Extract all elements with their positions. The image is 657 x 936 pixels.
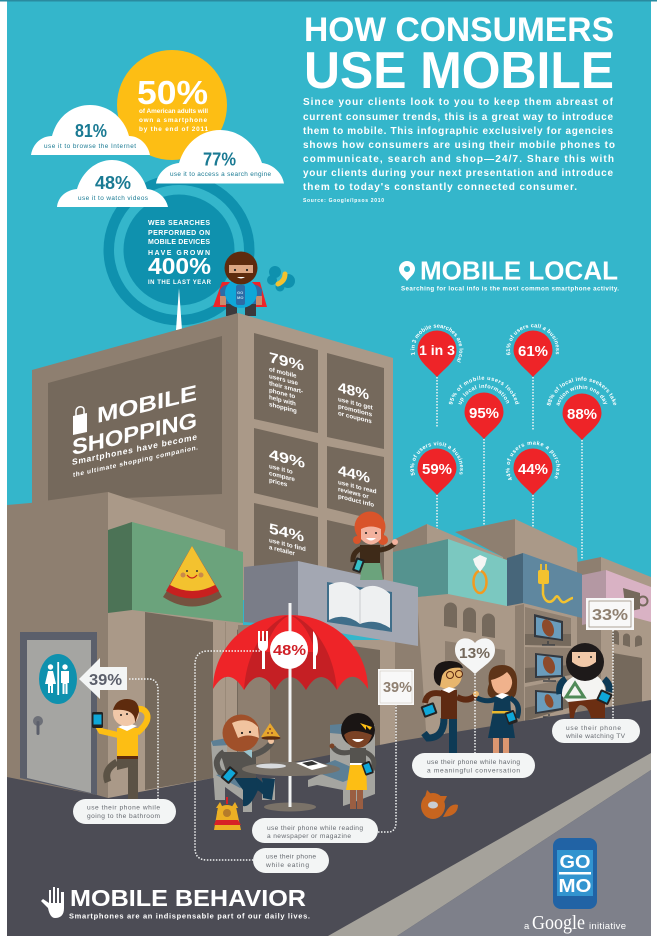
label: bathroom bbox=[73, 799, 176, 824]
cloud: 81%: 81% bbox=[75, 121, 107, 141]
road shoulder bbox=[397, 770, 651, 936]
billboard: pizza bbox=[108, 522, 243, 623]
logo: GO MO bbox=[553, 838, 597, 909]
window stat: 44%: product info bbox=[338, 493, 374, 509]
window stat: 79%: phone to bbox=[269, 387, 295, 401]
label: tv: use their phone bbox=[566, 725, 621, 732]
heading: mobile shopping: SHOPPING bbox=[72, 408, 197, 460]
label: eating bbox=[253, 848, 329, 873]
cloud: 48%: 48% bbox=[95, 173, 131, 193]
character: man scratching head bbox=[92, 699, 148, 799]
pin: 88%: 88% bbox=[567, 406, 597, 423]
yellow circle stat bbox=[117, 50, 227, 160]
callout heart: 13% bbox=[455, 638, 495, 674]
heading: mobile shopping: Smartphones have become bbox=[72, 432, 197, 467]
target circle stat: HAVE GROWN bbox=[148, 250, 210, 257]
window stat: 54%: 54% bbox=[269, 521, 304, 546]
heading: mobile shopping: the ultimate shopping companion. bbox=[73, 444, 198, 479]
pin: 59%: 59% of users visit a business bbox=[410, 441, 463, 476]
callout arrow: 39% bathroom bbox=[79, 658, 127, 699]
tagline: a Google initiative: a bbox=[524, 921, 530, 932]
character: man with glasses bbox=[420, 661, 479, 753]
window stat: 54%: a retailer bbox=[269, 544, 295, 558]
window stat: 48%: 48% bbox=[338, 380, 369, 404]
label: conversation: a meaningful conversation bbox=[427, 768, 520, 774]
right bench bbox=[308, 723, 375, 806]
window stat: 49% bbox=[269, 447, 305, 493]
heading: mobile behavior bbox=[41, 885, 310, 920]
window stat: 49%: compare bbox=[269, 470, 295, 484]
label: conversation bbox=[412, 753, 535, 778]
intro text: shows how consumers are using their mobile phones to bbox=[303, 140, 615, 151]
cloud: 81% bbox=[31, 105, 150, 155]
window stat: 49%: 49% bbox=[269, 447, 305, 472]
billboard: ring bbox=[393, 539, 507, 606]
sidewalk bbox=[328, 753, 651, 936]
window stat: 48%: or coupons bbox=[338, 410, 372, 425]
yellow circle stat: by the end of 2011 bbox=[139, 126, 208, 133]
target circle stat: MOBILE DEVICES bbox=[148, 239, 210, 246]
icon: mug bbox=[623, 588, 648, 612]
icon: fork bbox=[258, 631, 268, 669]
pin: 95%: 95% bbox=[469, 405, 499, 422]
target circle stat: WEB SEARCHES bbox=[148, 220, 210, 227]
icon: plug and cord bbox=[538, 564, 573, 602]
left bench bbox=[211, 738, 275, 812]
cloud: 77% bbox=[156, 130, 284, 184]
tagline: a Google initiative: Google bbox=[532, 912, 585, 934]
window stat: 79%: users use bbox=[269, 373, 298, 387]
icon: hand bbox=[41, 887, 64, 918]
pin: 44%: 44% bbox=[518, 461, 548, 478]
icon: diamond ring bbox=[473, 555, 487, 593]
intro text bbox=[303, 97, 615, 204]
label: conversation: use their phone while having bbox=[427, 759, 520, 766]
callout arrow: 39% bathroom: 39% bbox=[89, 672, 122, 689]
cloud: 48%: use it to watch videos bbox=[78, 195, 148, 202]
window stat: 44%: use it to read bbox=[338, 479, 377, 496]
dotted pin stems bbox=[437, 377, 582, 560]
icon: superhero with phone: MO bbox=[237, 295, 243, 300]
pin: 88%: action within one day bbox=[556, 384, 608, 406]
cafe table base bbox=[264, 603, 316, 812]
intro text: current consumer trends, this is a great way to introduce bbox=[303, 112, 613, 123]
window stat: 79% bbox=[269, 350, 304, 417]
title: HOW CONSUMERS bbox=[304, 11, 614, 49]
title: USE MOBILE bbox=[304, 42, 614, 100]
label: reading: a newspaper or magazine bbox=[267, 833, 351, 840]
character: bearded man eating bbox=[217, 714, 280, 806]
title bbox=[304, 11, 614, 100]
target circle stat: 400% bbox=[148, 253, 211, 279]
callout box: 33% bbox=[586, 598, 634, 630]
icon: cat bbox=[421, 790, 458, 819]
pin: 95%: up local information bbox=[458, 384, 510, 404]
pin: 95% bbox=[448, 376, 520, 439]
cloud: 48% bbox=[57, 160, 168, 207]
window stat: 49%: use it to bbox=[269, 463, 293, 476]
billboard: coffee bbox=[582, 570, 651, 625]
pin: 59%: 59% bbox=[422, 461, 452, 478]
heading: mobile local: MOBILE LOCAL bbox=[420, 256, 618, 286]
pin: 44%: 44% of users make a purchase bbox=[506, 440, 560, 480]
target circle stat bbox=[104, 174, 254, 326]
target circle stat: PERFORMED ON bbox=[148, 230, 210, 237]
pin: 1 in 3: 1 in 3 mobile searches are local bbox=[410, 324, 464, 363]
window stat: 79%: of mobile bbox=[269, 366, 297, 380]
pin: 59% bbox=[410, 441, 463, 495]
heading: mobile local: Searching for local info is the most common smartphone activity. bbox=[401, 286, 619, 292]
window stat: 79%: help with bbox=[269, 394, 296, 408]
tagline: a Google initiative bbox=[524, 912, 626, 934]
lower left building bbox=[7, 492, 394, 800]
callout heart: 13%: 13% bbox=[459, 645, 490, 662]
window stat: 79%: shopping bbox=[269, 401, 297, 415]
yellow circle stat: own a smartphone bbox=[139, 117, 207, 124]
character: woman with yellow skirt bbox=[330, 713, 375, 809]
label: eating: use their phone bbox=[266, 854, 316, 860]
window stat: 48% bbox=[338, 380, 374, 426]
icon: restroom sign bbox=[39, 654, 77, 704]
umbrella: 48% bbox=[273, 643, 306, 659]
cloud: 77%: use it to access a search engine bbox=[170, 171, 271, 178]
window stat: 44% bbox=[338, 463, 377, 510]
pin: 88% bbox=[546, 376, 616, 440]
yellow circle stat: 50% bbox=[137, 74, 208, 111]
tv display panels bbox=[525, 607, 571, 721]
icon: superhero with phone bbox=[213, 252, 267, 316]
yellow circle stat: of American adults will bbox=[139, 108, 208, 115]
icon: recycling bbox=[566, 683, 584, 697]
window stat: 48%: use it to get bbox=[338, 396, 374, 412]
pin: 1 in 3: 1 in 3 bbox=[419, 342, 455, 358]
tagline: a Google initiative: initiative bbox=[589, 921, 626, 932]
heading: mobile shopping: MOBILE bbox=[97, 380, 197, 428]
label: reading: use their phone while reading bbox=[267, 825, 363, 832]
callout box: 39% reading: 39% bbox=[383, 680, 412, 696]
window stat: 54%: use it to find bbox=[269, 537, 306, 553]
window stat: 49%: prices bbox=[269, 477, 288, 489]
icon: open book bbox=[327, 582, 392, 632]
cloud: 77%: 77% bbox=[203, 150, 236, 170]
label: reading bbox=[252, 818, 378, 843]
callout box: 39% reading bbox=[378, 669, 414, 705]
heading: mobile shopping bbox=[72, 380, 198, 479]
character: woman with brown hair bbox=[477, 665, 518, 753]
icon: location pin bbox=[399, 261, 415, 281]
target circle stat: IN THE LAST YEAR bbox=[148, 280, 212, 286]
window stat: 44%: reviews or bbox=[338, 486, 369, 501]
intro text: them to today's constantly connected consumer. bbox=[303, 182, 577, 193]
street ground bbox=[7, 700, 651, 936]
billboard: book bbox=[244, 561, 418, 646]
pin: 61%: 61% bbox=[518, 343, 548, 360]
logo: GO MO: GO bbox=[560, 852, 590, 872]
label: tv bbox=[552, 719, 640, 743]
restroom door bbox=[20, 632, 97, 795]
main building bbox=[32, 313, 393, 620]
icon: shopping bag bbox=[73, 407, 87, 435]
label: tv: while watching TV bbox=[565, 733, 626, 740]
window stat: 79%: their smart- bbox=[269, 380, 303, 395]
cloud: 81%: use it to browse the Internet bbox=[44, 143, 136, 150]
heading: mobile behavior: MOBILE BEHAVIOR bbox=[70, 885, 306, 911]
label: bathroom: use their phone while bbox=[87, 804, 160, 812]
right street buildings bbox=[380, 519, 651, 750]
icon: butterfly bbox=[267, 266, 295, 292]
intro text: communicate, search and shop—24/7. Share this with bbox=[303, 154, 614, 165]
icon: knife bbox=[313, 631, 318, 669]
umbrella bbox=[213, 603, 368, 691]
pin: 61%: 61% of users call a business bbox=[506, 324, 559, 356]
heading: mobile behavior: Smartphones are an indispensable part of our daily lives. bbox=[69, 912, 310, 920]
pin: 88%: 88% of local info seekers take bbox=[546, 376, 616, 406]
icon: superhero with phone: GO bbox=[237, 290, 243, 295]
character: bearded man with recycling shirt bbox=[560, 643, 613, 718]
intro text: Since your clients look to you to keep them abreast of bbox=[303, 97, 614, 108]
pin: 95%: 95% of mobile users looked bbox=[448, 376, 520, 404]
table top bbox=[242, 760, 340, 776]
spire bbox=[176, 288, 182, 330]
logo: GO MO: MO bbox=[558, 876, 592, 896]
intro text: Source: Google/Ipsos 2010 bbox=[303, 198, 384, 204]
intro text: them to mobile. This infographic exclusively for agencies bbox=[303, 126, 613, 137]
intro text: your clients during your next presentation and introduce bbox=[303, 168, 613, 179]
window stat: 44%: 44% bbox=[338, 463, 370, 487]
icon: dog bbox=[214, 797, 241, 830]
label: eating: while eating bbox=[265, 862, 309, 869]
billboard: plug bbox=[507, 553, 582, 618]
callout box: 33%: 33% bbox=[592, 607, 628, 624]
window stat: 48%: promotions bbox=[338, 403, 373, 419]
pin: 61% bbox=[506, 324, 559, 377]
character: red haired woman bbox=[352, 512, 398, 580]
icon: pizza slice bbox=[163, 546, 222, 606]
window stat: 79%: 79% bbox=[269, 350, 304, 375]
window stat: 54% bbox=[269, 521, 306, 560]
label: bathroom: going to the bathroom bbox=[87, 813, 160, 820]
